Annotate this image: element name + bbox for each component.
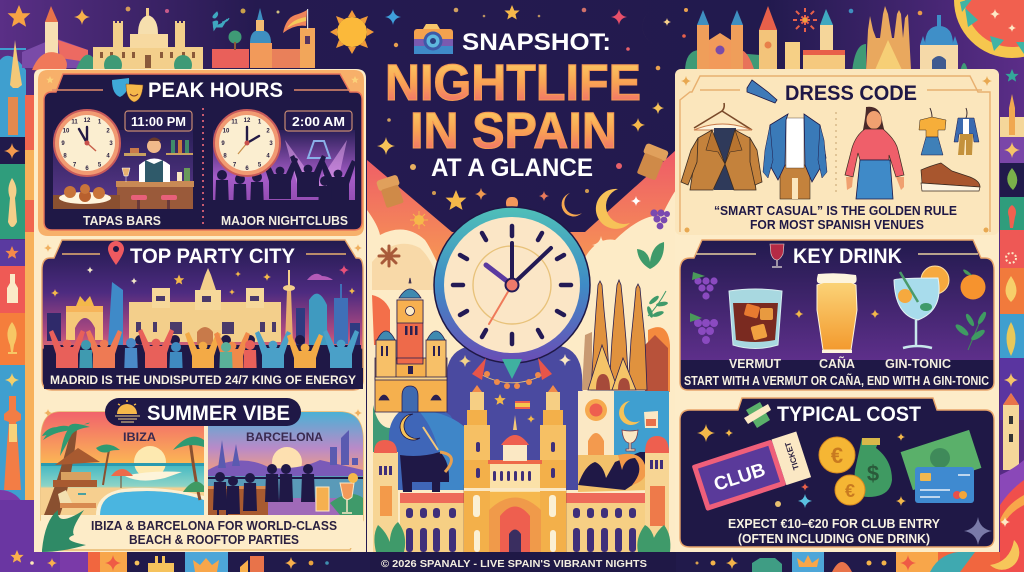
label: major nightclubs: MAJOR NIGHTCLUBS: [221, 213, 348, 228]
left clock: 6: [85, 166, 89, 172]
right clock: [214, 110, 280, 176]
caption: smart casual: [714, 204, 957, 232]
icon: cork right: [635, 143, 669, 181]
caption: ibiza and barcelona: BEACH & ROOFTOP PARTIES: [129, 533, 299, 547]
left decorative tile strip: [0, 40, 70, 552]
icon: euro coins and money bag: €: [831, 443, 843, 468]
bunting: [482, 372, 548, 383]
drink: beer: [817, 273, 857, 353]
icon: wine glass: [770, 244, 784, 267]
panel: peak hours: [38, 70, 364, 236]
decorative stars and corks around title: [376, 5, 671, 269]
panel: summer vibe: [41, 398, 363, 552]
time badge 11:00 PM: 11:00 PM: [131, 114, 186, 129]
Madrid skyline illustration: [47, 265, 360, 345]
drink: gin tonic: [894, 266, 949, 348]
top-left skyline: [8, 5, 374, 75]
icon: euro coins and money bag: €: [845, 481, 855, 501]
icon: leaf: [637, 242, 664, 269]
icon: club ticket: TICKET: [783, 441, 801, 471]
right clock: 10: [223, 128, 230, 134]
panel: top party city: [42, 240, 363, 390]
heading: peak hours: PEAK HOURS: [148, 79, 283, 102]
right clock: 1: [258, 120, 262, 126]
footer bar: [370, 552, 676, 572]
heading: in spain: IN SPAIN: [410, 102, 617, 159]
icon: euro coins and money bag: [819, 437, 892, 505]
icon: palm leaves: [42, 510, 86, 552]
left scene: tapas bar: [53, 130, 194, 209]
poster tiles, right of centre: [578, 391, 669, 492]
left clock: 12: [84, 118, 91, 124]
left clock: [54, 110, 120, 176]
top-right skyline: [682, 6, 968, 72]
caption: cost: EXPECT €10–€20 FOR CLUB ENTRY: [728, 517, 941, 531]
icon: sneaker: [747, 80, 777, 103]
icon: sunset: [115, 400, 140, 422]
time badge 2:00 AM: [285, 111, 352, 131]
caption: ibiza and barcelona: [91, 519, 337, 547]
right scene: nightclub: [213, 130, 356, 214]
pill heading: summer vibe: SUMMER VIBE: [147, 402, 290, 425]
garment: small dress: [919, 108, 946, 155]
right clock: 4: [266, 154, 270, 160]
tower building, left of centre: [375, 278, 447, 412]
icon: grapes: [650, 209, 670, 229]
garment: small jacket: [954, 108, 979, 155]
left clock: 9: [61, 141, 65, 147]
caption backing: [41, 515, 363, 548]
label: vermut: VERMUT: [729, 357, 781, 371]
crowd: [44, 329, 363, 389]
plants and moon on blue panel: [374, 522, 405, 552]
heading: typical cost: TYPICAL COST: [777, 402, 921, 426]
Ibiza beach scene: [41, 412, 204, 515]
label: caña: CAÑA: [819, 356, 855, 371]
garment: tan blazer on hanger: [681, 103, 762, 190]
right clock: 5: [258, 162, 262, 168]
label: barcelona: BARCELONA: [246, 430, 323, 444]
label: gin-tonic: GIN-TONIC: [885, 357, 951, 371]
drink: vermut glass: [729, 289, 782, 348]
left column cream backing: [34, 69, 366, 552]
panel: dress code: [675, 69, 999, 235]
title block: [385, 24, 641, 182]
right clock: 9: [221, 141, 225, 147]
left clock: 1: [98, 120, 102, 126]
panel: key drink: [680, 240, 994, 390]
heading: snapshot: SNAPSHOT:: [462, 29, 611, 56]
right clock: 3: [269, 141, 273, 147]
icon: euro coins and money bag: $: [867, 461, 879, 486]
time badge 11:00 PM: [125, 111, 192, 131]
grapes left: [690, 272, 718, 344]
panel: typical cost: [680, 398, 994, 547]
time badge 2:00 AM: 2:00 AM: [292, 114, 345, 129]
Barcelona rooftop scene: [208, 412, 363, 515]
right clock: 6: [245, 166, 249, 172]
icon: crossed banknotes: [744, 402, 771, 428]
bottom decorative tile strip: [0, 500, 1024, 572]
central clock: [434, 197, 590, 363]
garment: brown shoe: [921, 163, 980, 191]
central palace: [373, 354, 670, 555]
icon: location pin: [108, 241, 124, 265]
left clock: 2: [106, 128, 110, 134]
icon: flower: [379, 246, 399, 266]
icon: club ticket: CLUB: [711, 460, 768, 496]
garment: blue blazer and chinos: [763, 114, 827, 199]
heading: at a glance: AT A GLANCE: [431, 154, 593, 182]
right clock: 7: [233, 162, 237, 168]
left clock: 10: [63, 128, 70, 134]
Sagrada Familia, right of centre: [582, 280, 668, 392]
left clock: 5: [98, 162, 102, 168]
caption: smart casual: FOR MOST SPANISH VENUES: [750, 218, 924, 232]
orange and herb: [954, 270, 988, 350]
right clock: 11: [231, 120, 238, 126]
heading: top party city: TOP PARTY CITY: [130, 245, 295, 268]
caption: cost: (OFTEN INCLUDING ONE DRINK): [738, 532, 930, 546]
right column cream backing: [675, 69, 999, 552]
caption: cost: [728, 517, 941, 546]
left clock: 11: [71, 120, 78, 126]
label: ibiza: IBIZA: [123, 430, 156, 444]
left clock: 7: [73, 162, 77, 168]
heading: key drink: KEY DRINK: [793, 245, 902, 268]
icon: cork left: [376, 174, 406, 209]
heading: dress code: DRESS CODE: [785, 82, 917, 105]
right decorative tile strip: [954, 0, 1024, 572]
left clock: 8: [63, 154, 67, 160]
icon: theatre masks: [112, 78, 143, 102]
icon: camera: [414, 24, 453, 54]
caption: madrid: MADRID IS THE UNDISPUTED 24/7 KING OF ENERGY: [50, 373, 356, 387]
left clock: 4: [106, 154, 110, 160]
caption: smart casual: “SMART CASUAL” IS THE GOLDEN RULE: [714, 204, 957, 218]
label: tapas bars: TAPAS BARS: [83, 213, 161, 228]
copyright text: © 2026 SPANALY - LIVE SPAIN'S VIBRANT NIGHTS: [381, 559, 647, 570]
icon: club ticket: [692, 431, 811, 511]
right clock: 2: [266, 128, 270, 134]
pill heading: summer vibe: [105, 398, 301, 426]
right clock: 8: [223, 154, 227, 160]
left clock: 3: [109, 141, 113, 147]
heading: nightlife: NIGHTLIFE: [385, 54, 641, 111]
caption: ibiza and barcelona: IBIZA & BARCELONA FOR WORLD-CLASS: [91, 519, 337, 533]
garment: woman in pink top and jeans: [845, 107, 904, 199]
right clock: 12: [244, 118, 251, 124]
icon: banknote and card: [901, 430, 981, 503]
centre background: [367, 150, 676, 552]
icon: olive branch: [646, 291, 668, 318]
